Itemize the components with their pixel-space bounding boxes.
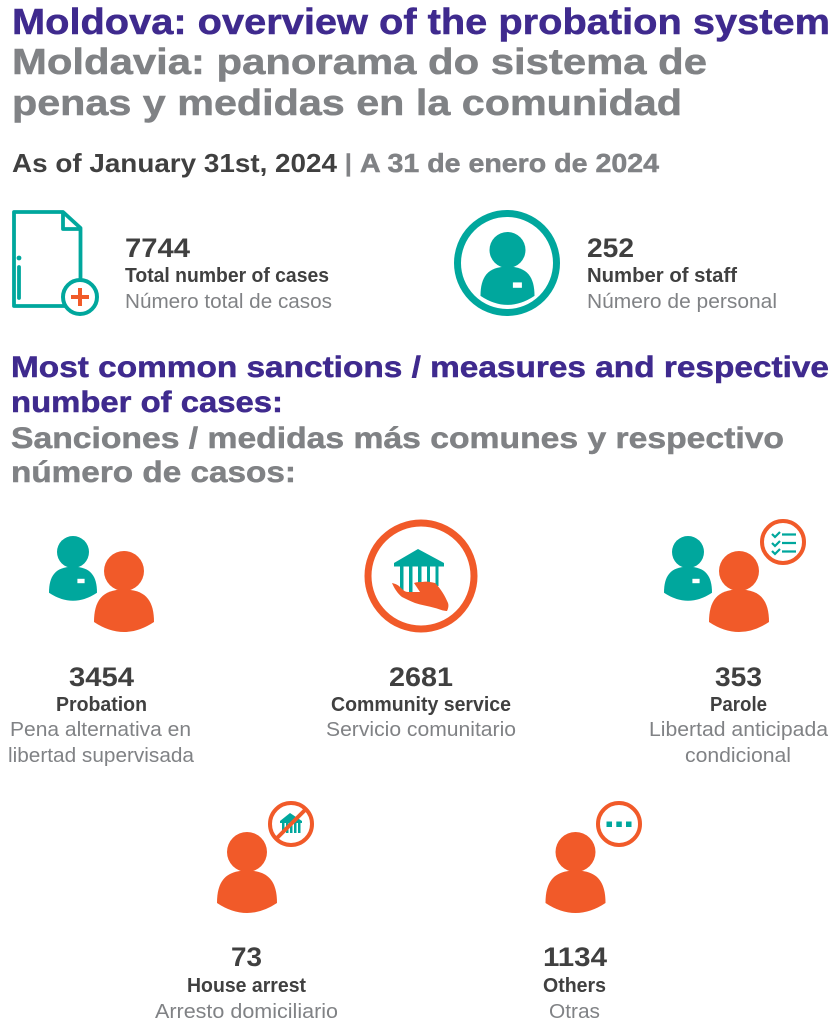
panel: others [543,803,640,1023]
stat: probation [8,662,195,767]
stat: parole: condicional [685,745,791,767]
panel: probation [8,536,195,767]
stat: total number of cases: 7744 [125,233,190,263]
icon: officer, person and checklist [664,521,804,632]
stat: total number of cases: Total number of cases [125,265,329,287]
stat: parole: Parole [710,694,767,716]
section heading: Sanciones / medidas más comunes y respectivo [11,422,784,455]
icon: officer and person [49,536,154,632]
stat: community service: Community service [331,694,511,716]
panel: community service [326,523,516,741]
stat: house arrest: Arresto domiciliario [155,1001,338,1023]
stat: community service: Servicio comunitario [326,719,516,741]
icon: hand holding building [368,523,474,629]
panel: parole [649,521,829,767]
icon: staff member in circle [458,214,556,312]
stat: others: Others [543,975,606,997]
icon: person and ellipsis bubble [546,803,640,913]
stat: number of staff: Number of staff [587,265,737,287]
stat: parole: 353 [715,662,762,692]
stat: house arrest [155,942,338,1023]
stat: total number of cases: Número total de casos [125,291,332,313]
stat: parole: Libertad anticipada [649,719,829,741]
section heading: number of cases: [11,386,283,419]
stat: others: Otras [549,1001,600,1023]
stat: number of staff: Número de personal [587,291,777,313]
section heading: Most common sanctions / measures and respective [11,351,829,384]
stat: number of staff: 252 [587,233,634,263]
title [12,1,830,123]
stat: probation: Pena alternativa en [10,719,191,741]
stat: others: 1134 [543,942,607,972]
stat: probation: 3454 [69,662,134,692]
icon: document with plus [14,212,97,314]
stat: total number of cases [125,233,332,313]
stat: parole [649,662,829,767]
stat: probation: libertad supervisada [8,745,195,767]
stat: probation: Probation [56,694,147,716]
panel: total cases [14,212,332,314]
title: Moldova: overview of the probation system [12,1,830,42]
stat: house arrest: House arrest [187,975,306,997]
panel: house arrest [155,803,338,1023]
stat: house arrest: 73 [231,942,262,972]
date line: | [345,150,352,177]
date line: As of January 31st, 2024 [12,148,338,178]
panel: staff [458,214,777,313]
section heading: número de casos: [11,456,296,489]
icon: person and crossed-out building [217,803,312,913]
date line: A 31 de enero de 2024 [360,148,660,178]
section heading [11,351,829,489]
title: penas y medidas en la comunidad [12,82,682,123]
date line [12,148,660,178]
stat: number of staff [587,233,777,313]
title: Moldavia: panorama do sistema de [12,41,707,82]
stat: community service [326,662,516,741]
stat: others [543,942,607,1023]
stat: community service: 2681 [389,662,453,692]
